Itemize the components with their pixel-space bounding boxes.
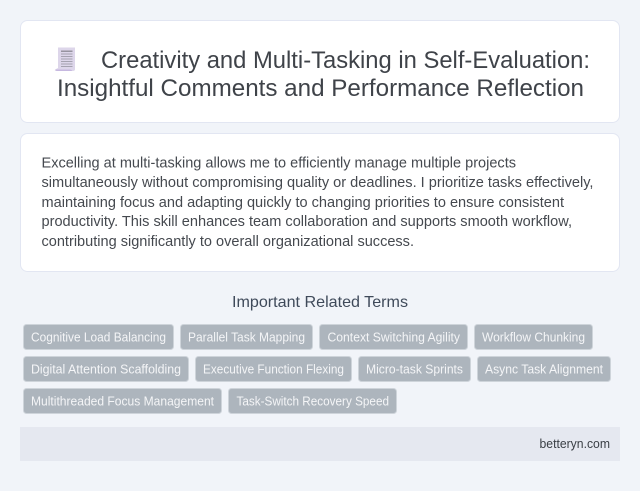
chip: Async Task Alignment [485, 362, 604, 376]
chip [24, 388, 222, 414]
footer source text: betteryn.com [540, 437, 610, 451]
chip: Executive Function Flexing [203, 362, 344, 376]
chip [474, 324, 592, 350]
title: Insightful Comments and Performance Reflection [57, 75, 584, 102]
chip: Multithreaded Focus Management [31, 394, 215, 408]
chip: Digital Attention Scaffolding [31, 362, 181, 376]
chip: Micro-task Sprints [366, 362, 463, 376]
text block: description: productivity. This skill enhances team collaboration and supports smooth workflow, [42, 214, 572, 230]
chip [320, 324, 468, 350]
title: Creativity and Multi-Tasking in Self-Evaluation: [101, 47, 590, 74]
chip [478, 356, 610, 382]
chip: Cognitive Load Balancing [31, 330, 166, 344]
text block: description: simultaneously without compromising quality or deadlines. I prioritize tasks effectively, [42, 175, 594, 191]
related term chips [24, 324, 610, 414]
chip: Context Switching Agility [328, 330, 461, 344]
chip [24, 356, 188, 382]
chip [180, 324, 312, 350]
chip [196, 356, 352, 382]
title [57, 47, 590, 102]
text block: description: contributing significantly to overall organizational success. [42, 234, 414, 250]
panel: description [20, 134, 620, 272]
footer bar [20, 427, 620, 461]
chip [228, 388, 396, 414]
chip [24, 324, 174, 350]
text block: description: Excelling at multi-tasking allows me to efficiently manage multiple projects [42, 156, 516, 172]
heading: related terms: Important Related Terms [232, 294, 408, 311]
panel: title card [20, 20, 620, 122]
text block: description [42, 156, 594, 250]
chip: Parallel Task Mapping [188, 330, 305, 344]
chip [358, 356, 470, 382]
text block: description: maintaining focus and adapting quickly to changing priorities to ensure consistent [42, 195, 564, 211]
chip: Task-Switch Recovery Speed [236, 394, 389, 408]
chip: Workflow Chunking [482, 330, 585, 344]
icon: paper scroll [55, 48, 75, 71]
